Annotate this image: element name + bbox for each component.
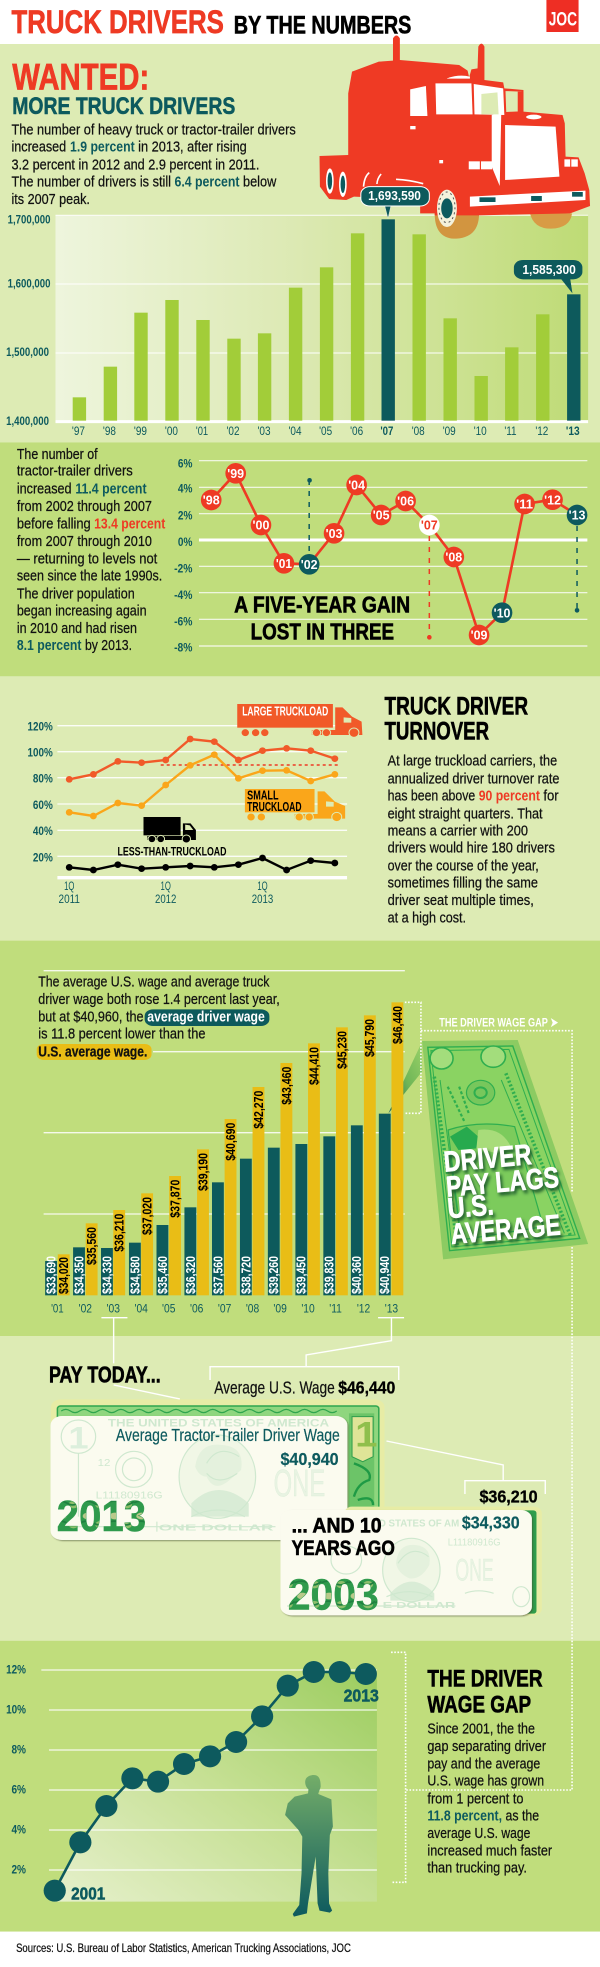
panel: wages [0, 941, 600, 1337]
line chart: wage gap: 6% [11, 1783, 26, 1796]
heading: the driver wage gap: THE DRIVER [427, 1666, 543, 1692]
text block: driver increase: below [243, 174, 277, 190]
series: large truckload [66, 736, 338, 783]
text block: wage comparison: The average U.S. wage and average truck [38, 974, 270, 990]
icon: standing man silhouette [285, 1775, 333, 1917]
year: 2003: 2003 [288, 1570, 379, 1619]
line chart: annual percent change: -4% [174, 589, 192, 602]
text block: driver increase [11, 121, 296, 208]
bar chart: number of drivers: '10 [474, 425, 487, 438]
icon: 2013 dollar bill: THE UNITED STATES OF AMERICA [108, 1416, 329, 1429]
bar value labels: average U.S. wage: $36,210 [112, 1214, 127, 1252]
text block: wage comparison: U.S. average wage. [38, 1043, 147, 1060]
axis: wage years: '06 [190, 1302, 203, 1315]
text block: driver increase: in 2013, after rising [138, 139, 247, 155]
connector: 2003 U.S. wage [386, 1441, 545, 1494]
bar value labels: average U.S. wage: $43,460 [279, 1067, 294, 1105]
bar chart: number of drivers: '00 [165, 425, 178, 438]
icon: less-than-truckload truck [117, 817, 227, 858]
line chart: turnover rate: 60% [33, 799, 53, 812]
chart caption: a five-year gain lost in three: A FIVE-YEAR GAIN [234, 593, 410, 618]
bar value labels: average U.S. wage: $45,230 [334, 1031, 349, 1069]
area under wage gap line [55, 1672, 377, 1902]
text block: wage gap explanation: U.S. wage has grown [427, 1773, 544, 1789]
text block: wage gap explanation: than trucking pay. [427, 1860, 527, 1876]
text block: driver increase: 3.2 percent in 2012 and 2.9 percent in 2011. [11, 156, 259, 173]
line chart: annual percent change: '08 [445, 551, 462, 565]
heading: truck driver turnover: TRUCK DRIVER [385, 692, 528, 720]
heading: the driver wage gap [427, 1666, 543, 1718]
bar chart: number of drivers: '12 [535, 425, 548, 438]
bar value labels: average driver wage: $35,460 [155, 1256, 170, 1294]
bar value labels: average U.S. wage: $37,020 [140, 1197, 154, 1235]
text block: wage comparison: but at $40,960, the [38, 1008, 144, 1025]
bar chart: number of drivers: '11 [504, 425, 517, 438]
line chart: annual percent change: '09 [471, 629, 488, 643]
heading: truck driver turnover: TURNOVER [385, 717, 489, 745]
line chart: turnover rate: 1Q [161, 880, 171, 893]
text block: turnover explanation: driver seat multiple times, [388, 892, 534, 909]
heading: and 10 years ago [292, 1513, 395, 1560]
text block: wage gap explanation: gap separating driver [427, 1738, 547, 1755]
footer: sources [0, 1932, 600, 1967]
text block: five-year gain: tractor-trailer drivers [17, 463, 133, 479]
bar chart: number of drivers: '04 [289, 425, 302, 438]
bar chart: number of drivers: 1,600,000 [8, 277, 51, 290]
bar value labels: average driver wage: $40,940 [377, 1256, 392, 1294]
line chart: annual percent change: '11 [516, 498, 533, 512]
line chart: turnover rate: 2013 [252, 893, 273, 906]
text block: wage gap explanation: from 1 percent to [427, 1790, 523, 1807]
line chart: turnover rate: 2011 [59, 893, 80, 906]
text block: five-year gain: in 2010 and had risen [17, 620, 137, 637]
icon: small truckload truck [245, 788, 345, 822]
line chart: annual percent change: '01 [276, 557, 292, 572]
icon: small truckload truck: SMALL [247, 788, 279, 802]
label: average U.S. wage 2003: $36,210 [479, 1487, 538, 1506]
bar chart: number of drivers: '08 [412, 425, 425, 438]
bar chart: number of drivers: '99 [134, 425, 147, 438]
bar value labels: average driver wage: $34,330 [99, 1256, 114, 1294]
bar chart: number of drivers: '07 [380, 425, 393, 438]
axis: wage years: '08 [246, 1302, 259, 1315]
line chart: wage gap: 2013 [344, 1686, 379, 1706]
line chart: annual percent change [174, 457, 587, 654]
icon: 2013 dollar bill: 1 [355, 1415, 377, 1454]
bar value labels: average U.S. wage: $40,690 [223, 1123, 238, 1161]
axis: wage years: '12 [357, 1302, 370, 1315]
axis: wage years: '05 [162, 1302, 175, 1315]
callout: 2007 peak [361, 187, 429, 218]
line chart: turnover rate: 20% [33, 851, 53, 864]
bar value labels: average driver wage: $39,260 [266, 1256, 281, 1294]
bar value labels: average driver wage: $37,560 [210, 1256, 225, 1294]
bar chart: number of drivers: '97 [72, 425, 85, 438]
text block: five-year gain: seen since the late 1990s. [17, 568, 162, 584]
bar chart: number of drivers: '06 [350, 425, 363, 438]
text block: wage comparison: is 11.8 percent lower than the [38, 1026, 205, 1042]
footer: sources: Sources: U.S. Bureau of Labor Statistics, American Trucking Associations, JOC [16, 1941, 351, 1955]
axis: wage years: '03 [107, 1302, 120, 1315]
callout: 2013: 1,585,300 [522, 263, 576, 277]
text block: wage gap explanation: average U.S. wage [427, 1825, 530, 1842]
bar chart: number of drivers: '03 [258, 425, 271, 438]
icon: perspective dollar bill [388, 1040, 588, 1259]
bar chart: number of drivers: '98 [103, 425, 116, 438]
panel: pay today and ten years ago [0, 1336, 600, 1641]
text block: turnover explanation: means a carrier with 200 [388, 823, 528, 839]
text block: driver increase: The number of drivers is still [11, 174, 171, 190]
bar value labels: average U.S. wage [56, 1006, 405, 1294]
bar value labels: average U.S. wage: $44,410 [306, 1047, 321, 1085]
heading: and 10 years ago: YEARS AGO [292, 1535, 395, 1560]
text block: five-year gain: before falling [17, 515, 91, 532]
line chart: turnover rate: 1Q [64, 880, 75, 893]
line chart: turnover rate: 40% [33, 825, 53, 838]
text block: wage gap explanation [427, 1720, 553, 1876]
line chart: wage gap: 10% [6, 1703, 26, 1716]
line chart: annual percent change: 2% [178, 509, 192, 522]
icon: small truckload truck: TRUCKLOAD [247, 800, 302, 814]
text block: wage gap explanation: pay and the average [427, 1755, 540, 1772]
text block: wage comparison [37, 974, 280, 1060]
icon: large truckload truck [237, 704, 362, 737]
label: average tractor-trailer driver wage: $40,940 [280, 1449, 339, 1469]
icon: large truckload truck: LARGE TRUCKLOAD [242, 705, 328, 718]
icon: 2003 dollar bill: D STATES OF AM [379, 1518, 459, 1529]
logo: JOC: JOC [549, 9, 577, 30]
text block: five-year gain: The driver population [17, 585, 135, 602]
year: 2013: 2013 [57, 1492, 146, 1541]
text block: wage gap explanation: as the [505, 1808, 539, 1824]
text block: wage gap explanation: Since 2001, the the [427, 1720, 535, 1737]
bar chart: number of drivers: '09 [443, 425, 456, 438]
axis: wage years: '10 [301, 1302, 315, 1315]
bar value labels: average U.S. wage: $39,190 [195, 1153, 210, 1191]
line chart: annual percent change: '03 [326, 527, 342, 542]
text block: driver increase: its 2007 peak. [11, 191, 90, 208]
text block: turnover explanation: over the course of the year, [388, 857, 539, 874]
text block: five-year gain: increased [17, 480, 72, 497]
line chart: turnover rate: 2012 [155, 893, 176, 906]
text block: wage comparison: average driver wage [147, 1009, 265, 1025]
panel: a five-year gain lost in three [0, 442, 600, 677]
text block: turnover explanation: has been above [388, 788, 475, 804]
bar value labels: average driver wage: $34,580 [127, 1256, 142, 1294]
bar value labels: average driver wage: $38,720 [238, 1256, 253, 1294]
icon: red truck [320, 35, 590, 239]
bar chart: number of drivers: 1,700,000 [8, 213, 51, 226]
line chart: annual percent change: '13 [569, 509, 585, 523]
chart caption: a five-year gain lost in three [234, 593, 410, 645]
icon: 2003 dollar bill: L11180916G [448, 1537, 501, 1548]
text block: five-year gain: by 2013. [85, 637, 132, 654]
text block: five-year gain: from 2002 through 2007 [17, 498, 152, 515]
paired bars: driver and U.S. wages [45, 1002, 403, 1295]
bar value labels: average U.S. wage: $45,790 [362, 1019, 377, 1057]
line chart: turnover rate: 80% [33, 772, 53, 785]
text block: turnover explanation: for [543, 788, 559, 804]
icon: 2003 dollar bill: E DOLLAR [383, 1601, 457, 1610]
bill headline: driver pay lags U.S. average [442, 1139, 562, 1251]
heading: pay today: PAY TODAY... [49, 1363, 161, 1388]
line chart: turnover rate: 100% [28, 746, 53, 759]
icon: 2013 dollar bill: L11180916G [96, 1490, 163, 1501]
line chart: annual percent change: '04 [348, 479, 365, 493]
line chart: annual percent change: 4% [178, 482, 192, 495]
bar value labels: average driver wage: $39,830 [322, 1256, 337, 1294]
line chart: annual percent change: '00 [253, 519, 269, 533]
axis: wage years: '02 [79, 1302, 92, 1315]
chart caption: a five-year gain lost in three: LOST IN THREE [251, 620, 394, 645]
text block: turnover explanation: eight straight quarters. That [388, 805, 543, 822]
line chart: turnover rate: 1Q [257, 880, 268, 893]
line chart: annual percent change: '99 [227, 467, 244, 482]
connectors: wage gap links [101, 1002, 572, 1882]
axis: wage years: '07 [218, 1302, 231, 1315]
icon: 2003 dollar bill: ONE [455, 1553, 494, 1588]
axis: wage years: '09 [273, 1302, 287, 1315]
heading: truck driver turnover [385, 692, 528, 745]
text block: five-year gain: 11.4 percent [75, 480, 147, 497]
bar chart: number of drivers [6, 213, 588, 438]
icon: 2013 dollar bill: 1 [68, 1420, 89, 1456]
text block: five-year gain: The number of [17, 446, 98, 463]
line chart: annual percent change: -2% [174, 562, 192, 575]
icon: 2013 dollar bill [51, 1399, 385, 1541]
line chart: annual percent change: '10 [494, 606, 510, 621]
title: BY THE NUMBERS [234, 11, 411, 39]
header [0, 0, 600, 44]
heading: and 10 years ago: ... AND 10 [292, 1513, 382, 1537]
axis: wage years: '01 [51, 1302, 64, 1315]
text block: five-year gain [17, 446, 166, 654]
label: average U.S. wage 2013: Average U.S. Wage [214, 1378, 335, 1397]
callout: 2013 [514, 260, 582, 293]
series: small truckload [66, 751, 338, 819]
text block: turnover explanation: 90 percent [479, 788, 540, 804]
bar value labels: average driver wage: $36,320 [183, 1256, 198, 1294]
text block: wage comparison: driver wage both rose 1.4 percent last year, [38, 991, 280, 1008]
text block: five-year gain: — returning to levels not [17, 550, 158, 567]
label: average tractor-trailer driver wage: Average Tractor-Trailer Driver Wage [116, 1425, 340, 1445]
bar chart: number of drivers: '05 [319, 425, 332, 438]
bill headline: driver pay lags U.S. average: DRIVER [442, 1139, 533, 1179]
axis: wage years [51, 1302, 398, 1315]
line chart: wage gap: 12% [6, 1663, 26, 1676]
bar value labels: average driver wage: $34,350 [71, 1256, 86, 1294]
icon: less-than-truckload truck: LESS-THAN-TRUCKLOAD [117, 845, 227, 858]
bar chart: number of drivers: '02 [227, 425, 240, 438]
text block: five-year gain: 13.4 percent [94, 515, 166, 532]
axis: wage years: '11 [329, 1302, 342, 1315]
bar value labels: average U.S. wage: $46,440 [390, 1006, 405, 1044]
bar value labels: average U.S. wage: $34,020 [56, 1257, 71, 1294]
bar value labels: average driver wage: $40,360 [349, 1256, 364, 1294]
text block: five-year gain: 8.1 percent [17, 637, 82, 654]
text block: wage gap explanation: 11.8 percent, [427, 1808, 502, 1824]
bill headline: driver pay lags U.S. average: PAY LAGS [445, 1162, 560, 1204]
line chart: annual percent change: '02 [301, 558, 318, 573]
bar chart: number of drivers: '01 [196, 425, 208, 438]
line chart: annual percent change: '06 [397, 495, 414, 509]
label: average U.S. wage 2013: $46,440 [338, 1378, 395, 1397]
text block: five-year gain: began increasing again [17, 603, 147, 619]
line chart: annual percent change: 6% [178, 457, 192, 470]
line chart: wage gap: 2001 [71, 1884, 105, 1904]
bill headline: driver pay lags U.S. average: AVERAGE [449, 1210, 562, 1251]
line chart: annual percent change: '12 [544, 493, 561, 508]
axis: wage years: '04 [135, 1302, 148, 1315]
line chart: turnover rate [28, 720, 347, 906]
bar value labels: average driver wage: $33,690 [44, 1256, 58, 1294]
text block: driver increase: 1.9 percent [70, 139, 135, 155]
text block: driver increase: The number of heavy truck or tractor-trailer drivers [11, 121, 296, 138]
panel: the driver wage gap [0, 1641, 600, 1932]
line chart: wage gap: 2% [11, 1863, 26, 1876]
text block: driver increase: 6.4 percent [174, 174, 240, 190]
icon: 2013 dollar bill: ONE DOLLAR [159, 1523, 274, 1533]
heading: the driver wage gap: WAGE GAP [427, 1692, 531, 1718]
icon: 2003 dollar bill [280, 1507, 542, 1619]
line chart: annual percent change: '05 [373, 509, 390, 523]
bar value labels: average driver wage: $39,450 [294, 1256, 309, 1294]
logo: JOC [546, 0, 579, 32]
bar value labels: average U.S. wage: $42,270 [251, 1091, 266, 1129]
line chart: annual percent change: '07 [421, 519, 438, 533]
label: driver wage 2003: $34,330 [462, 1513, 520, 1532]
line chart: wage gap: 8% [11, 1743, 26, 1756]
bar chart: number of drivers: '13 [566, 425, 580, 438]
line chart: wage gap: 4% [11, 1823, 26, 1836]
line chart: wage gap [6, 1661, 379, 1904]
line chart: annual percent change: -8% [174, 641, 192, 654]
panel: wanted more truck drivers [0, 35, 600, 442]
heading: more truck drivers: MORE TRUCK DRIVERS [12, 92, 235, 120]
bill headline: driver pay lags U.S. average: U.S. [446, 1189, 495, 1225]
axis: wage years: '13 [385, 1302, 398, 1315]
bar value labels: average driver wage [44, 1256, 392, 1294]
text block: turnover explanation: at a high cost. [388, 909, 466, 926]
line chart: annual percent change: -6% [174, 615, 192, 628]
line chart: turnover rate: 120% [28, 720, 53, 733]
text block: turnover explanation [388, 753, 559, 926]
icon: 2013 dollar bill: ONE [274, 1462, 325, 1504]
heading: wanted: WANTED: [12, 57, 149, 98]
line chart: annual percent change: 0% [178, 536, 192, 549]
panel: truck driver turnover [0, 677, 600, 941]
line chart: annual percent change: '98 [203, 494, 220, 508]
text block: turnover explanation: sometimes filling the same [388, 875, 538, 891]
series: less-than-truckload [66, 855, 338, 873]
title: TRUCK DRIVERS [11, 4, 224, 40]
text block: five-year gain: from 2007 through 2010 [17, 533, 152, 550]
bar chart: number of drivers: 1,400,000 [6, 415, 49, 428]
bar value labels: average U.S. wage: $35,560 [84, 1227, 99, 1265]
label: average tractor-trailer driver wage [116, 1425, 340, 1469]
text block: wage gap explanation: increased much faster [427, 1842, 553, 1859]
bar value labels: average U.S. wage: $37,870 [168, 1180, 182, 1218]
icon: 2013 dollar bill: 12 [98, 1458, 110, 1469]
callout: 2007 peak: 1,693,590 [368, 189, 421, 203]
bar chart: number of drivers: 1,500,000 [6, 346, 49, 359]
text block: driver increase: increased [11, 139, 66, 155]
